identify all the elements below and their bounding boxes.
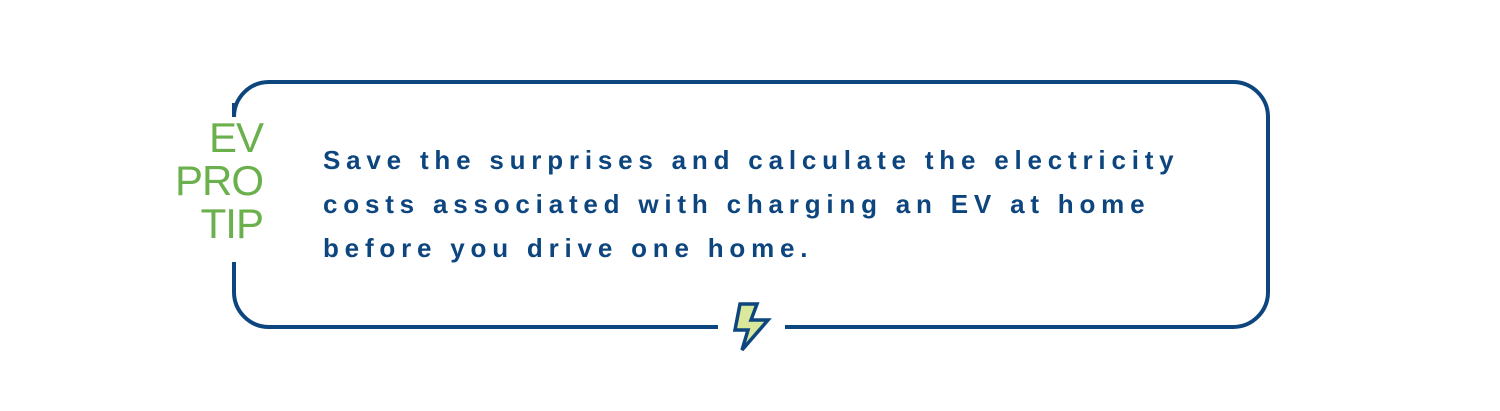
tip text: before you drive one home. — [323, 233, 813, 263]
heading: EV PRO TIP — [175, 114, 264, 247]
tip text: costs associated with charging an EV at home — [323, 189, 1150, 219]
tip text: Save the surprises and calculate the electricity — [323, 145, 1179, 175]
heading: EV PRO TIP: EV — [209, 114, 263, 161]
tip text — [323, 145, 1179, 263]
heading: EV PRO TIP: TIP — [201, 200, 263, 247]
heading: EV PRO TIP: PRO — [175, 157, 263, 204]
